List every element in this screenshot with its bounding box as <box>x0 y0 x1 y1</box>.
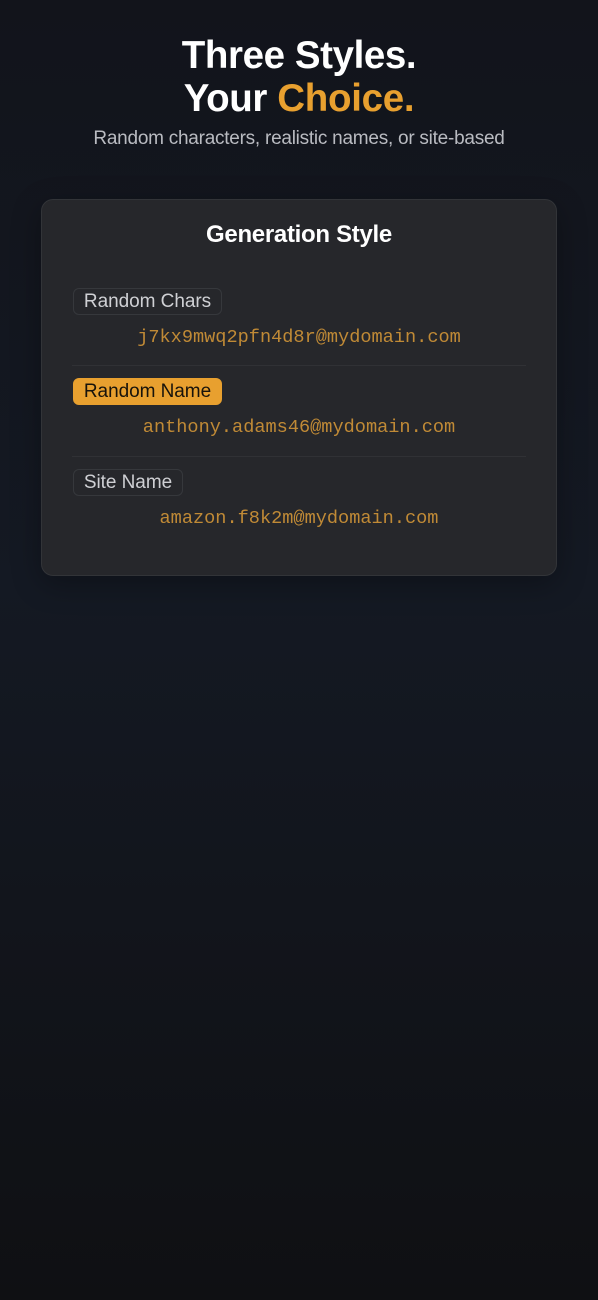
badge: random name, selected: Random Name <box>84 381 211 402</box>
title: Your Choice. <box>184 77 414 120</box>
email: random name: anthony.adams46@mydomain.com <box>143 417 455 438</box>
title <box>182 34 416 120</box>
badge: site name <box>73 469 183 496</box>
subtitle: Random characters, realistic names, or site-based <box>93 128 505 149</box>
panel: generation style <box>41 199 557 576</box>
badge: random name, selected <box>73 378 222 405</box>
email: site name: amazon.f8k2m@mydomain.com <box>160 508 438 529</box>
badge: random chars <box>73 288 222 315</box>
panel heading: Generation Style <box>206 221 392 248</box>
badge: random chars: Random Chars <box>84 291 211 312</box>
title: Three Styles. <box>182 34 416 77</box>
badge: site name: Site Name <box>84 472 172 493</box>
email: random chars: j7kx9mwq2pfn4d8r@mydomain.com <box>137 327 461 348</box>
